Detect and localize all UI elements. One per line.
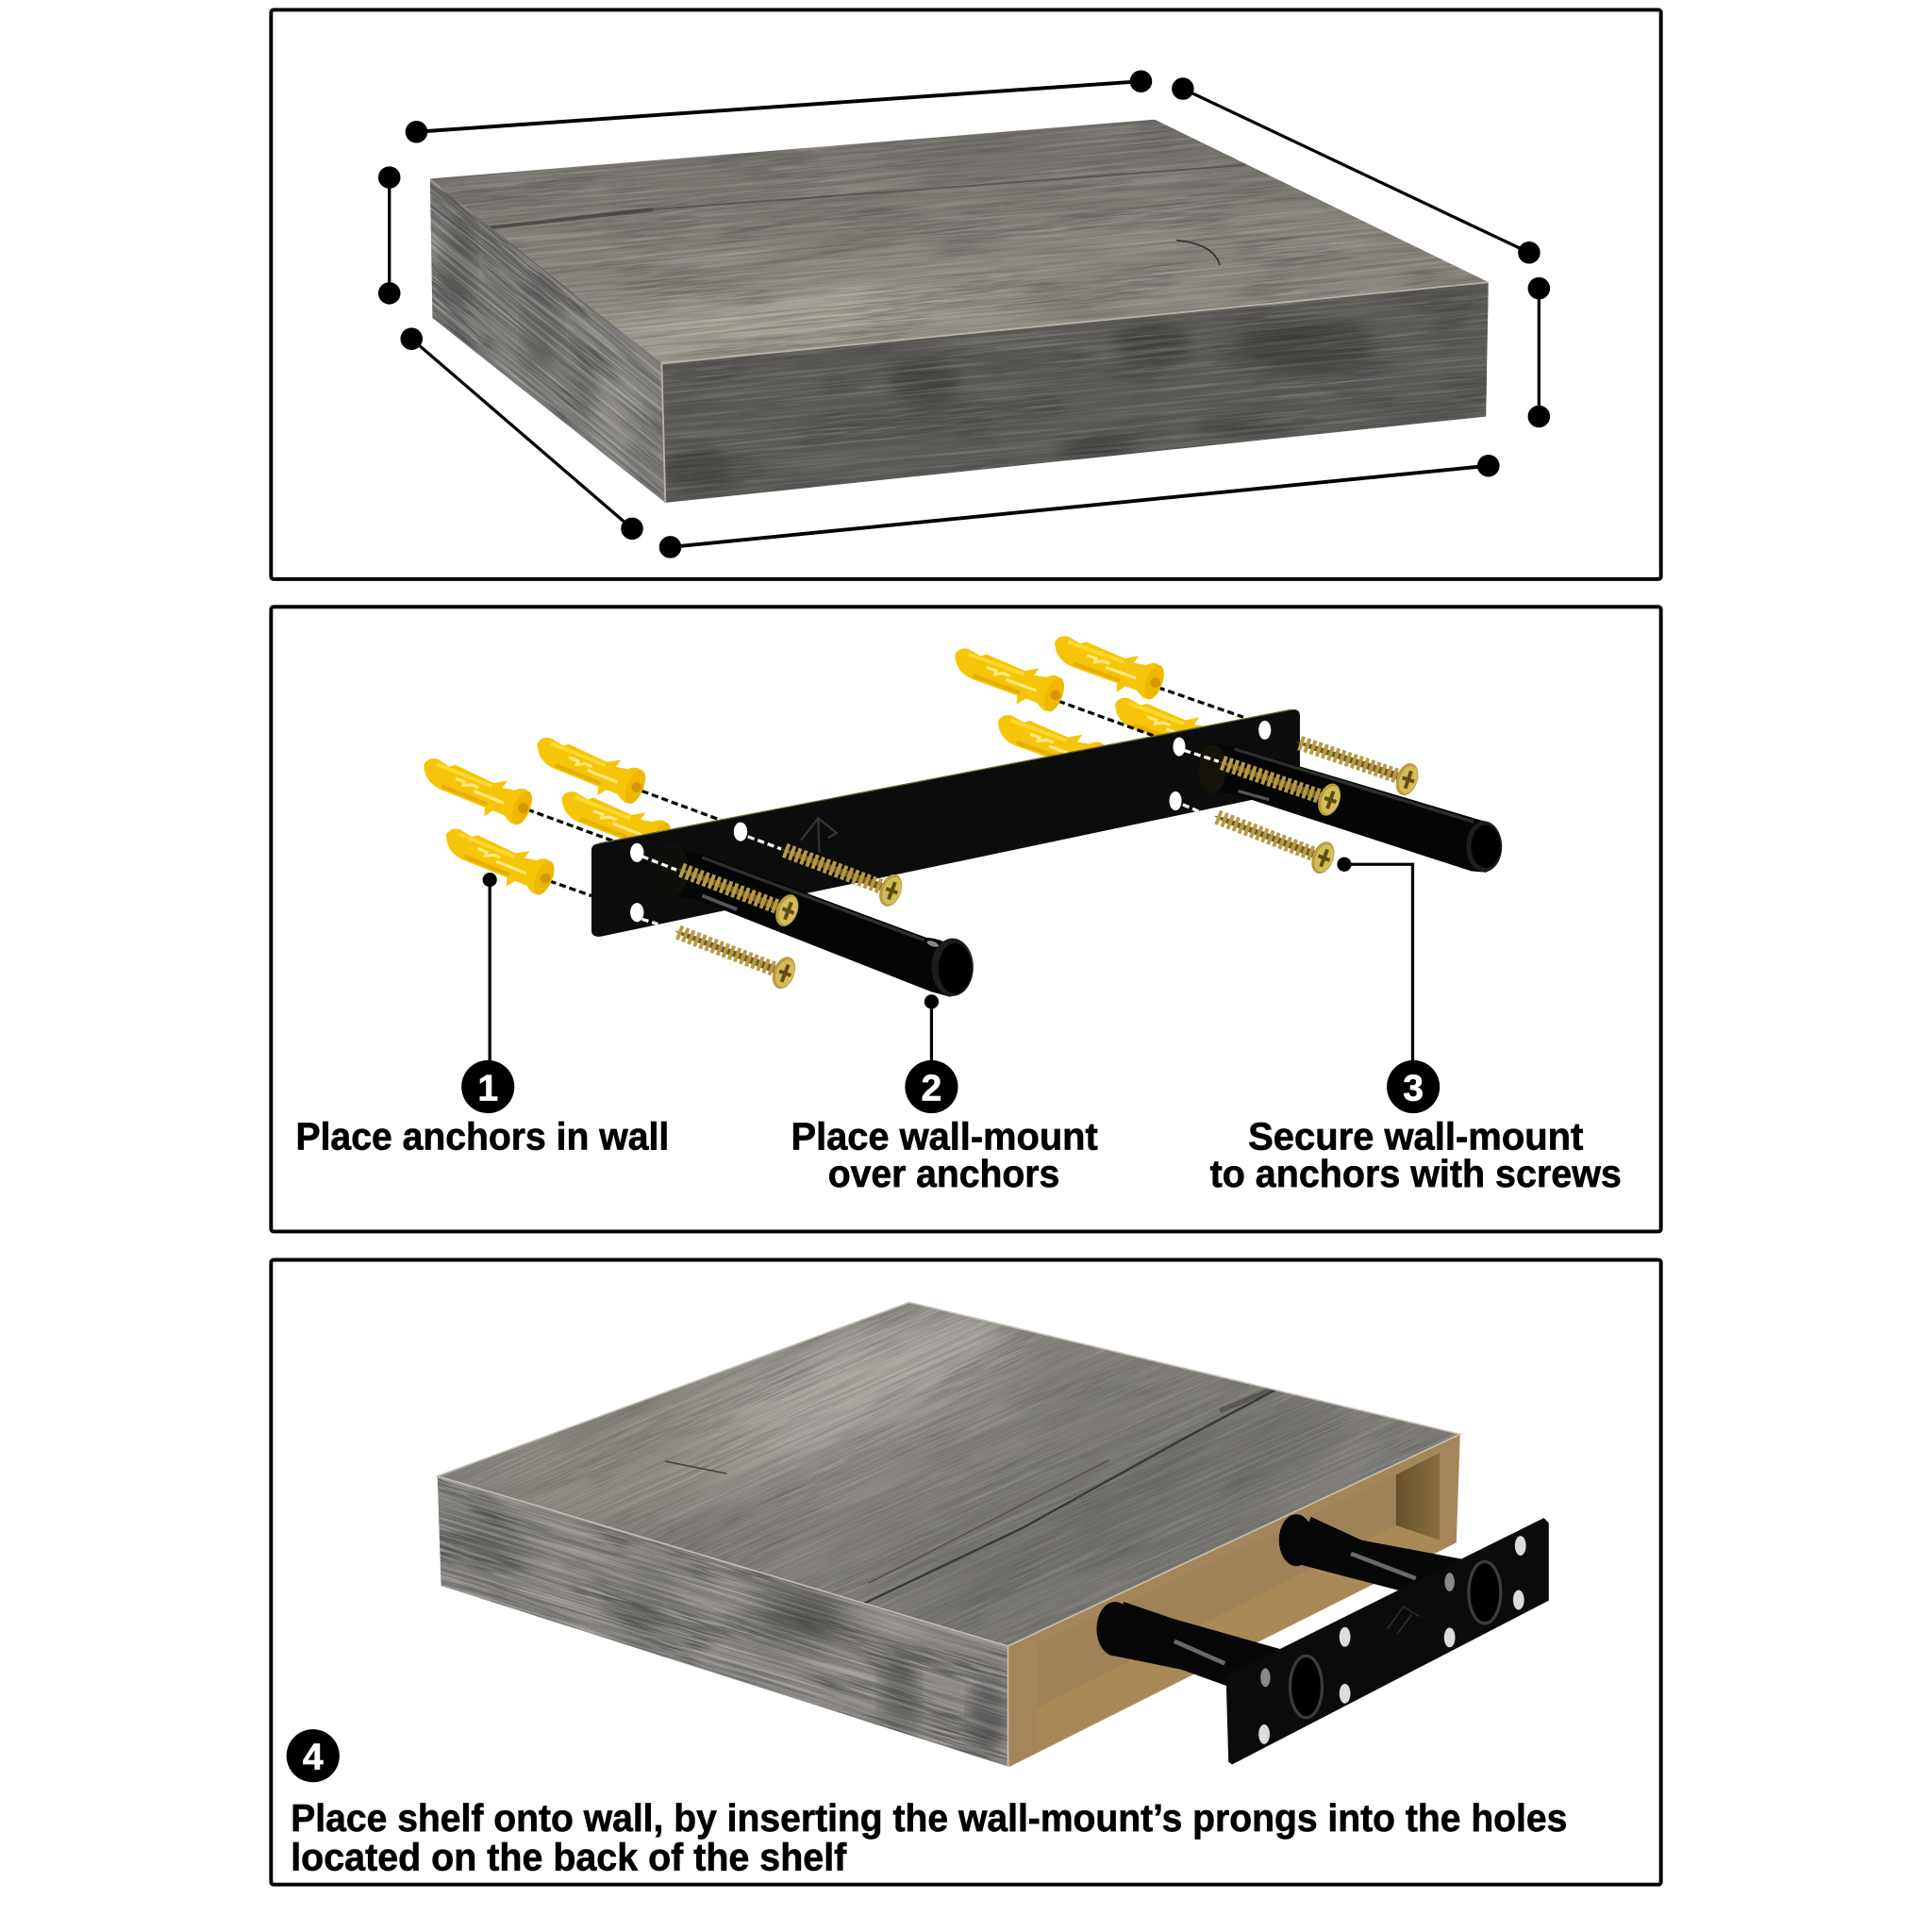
- step 3 callout: to anchors with screws: [1210, 1152, 1622, 1195]
- step 2 callout: [791, 994, 1098, 1195]
- step 1 callout: [295, 873, 669, 1158]
- panel: shelf dimensions: [271, 9, 1661, 597]
- wall-mount plate: [1226, 1518, 1549, 1764]
- right prong: [1199, 743, 1502, 873]
- shelf photo with wood grain: [430, 119, 1489, 503]
- panel: mounting steps: [271, 607, 1661, 1231]
- step 1 callout: Place anchors in wall: [295, 1115, 669, 1158]
- step 4 callout: Place shelf onto wall, by inserting the wall-mount’s prongs into the holes: [291, 1796, 1567, 1840]
- wall-mount bracket plate: [591, 709, 1300, 937]
- step 2 callout: Place wall-mount: [791, 1115, 1098, 1158]
- step 3 callout: [1210, 858, 1622, 1195]
- left prong: [655, 842, 974, 997]
- anchors behind the bracket: [553, 689, 1229, 863]
- step 4 callout: 4: [303, 1738, 324, 1778]
- white guides on plate: [641, 750, 1219, 924]
- panel: shelf placed on mount: [269, 1258, 1663, 1887]
- dimension lines: [379, 71, 1549, 558]
- dashed guides to the plate: [527, 688, 1243, 896]
- step 3 callout: 3: [1403, 1068, 1424, 1108]
- step 1 callout: 1: [477, 1068, 498, 1108]
- prongs: [1096, 1514, 1466, 1690]
- step 3 callout: Secure wall-mount: [1248, 1115, 1583, 1158]
- step 4 callout: located on the back of the shelf: [291, 1836, 847, 1879]
- screws: [669, 726, 1423, 992]
- step 2 callout: 2: [922, 1068, 941, 1108]
- shelf photo with back cavity: [436, 1302, 1462, 1767]
- anchors in front: [414, 627, 1169, 902]
- step 4 callout: [287, 1729, 1567, 1879]
- step 2 callout: over anchors: [828, 1152, 1059, 1195]
